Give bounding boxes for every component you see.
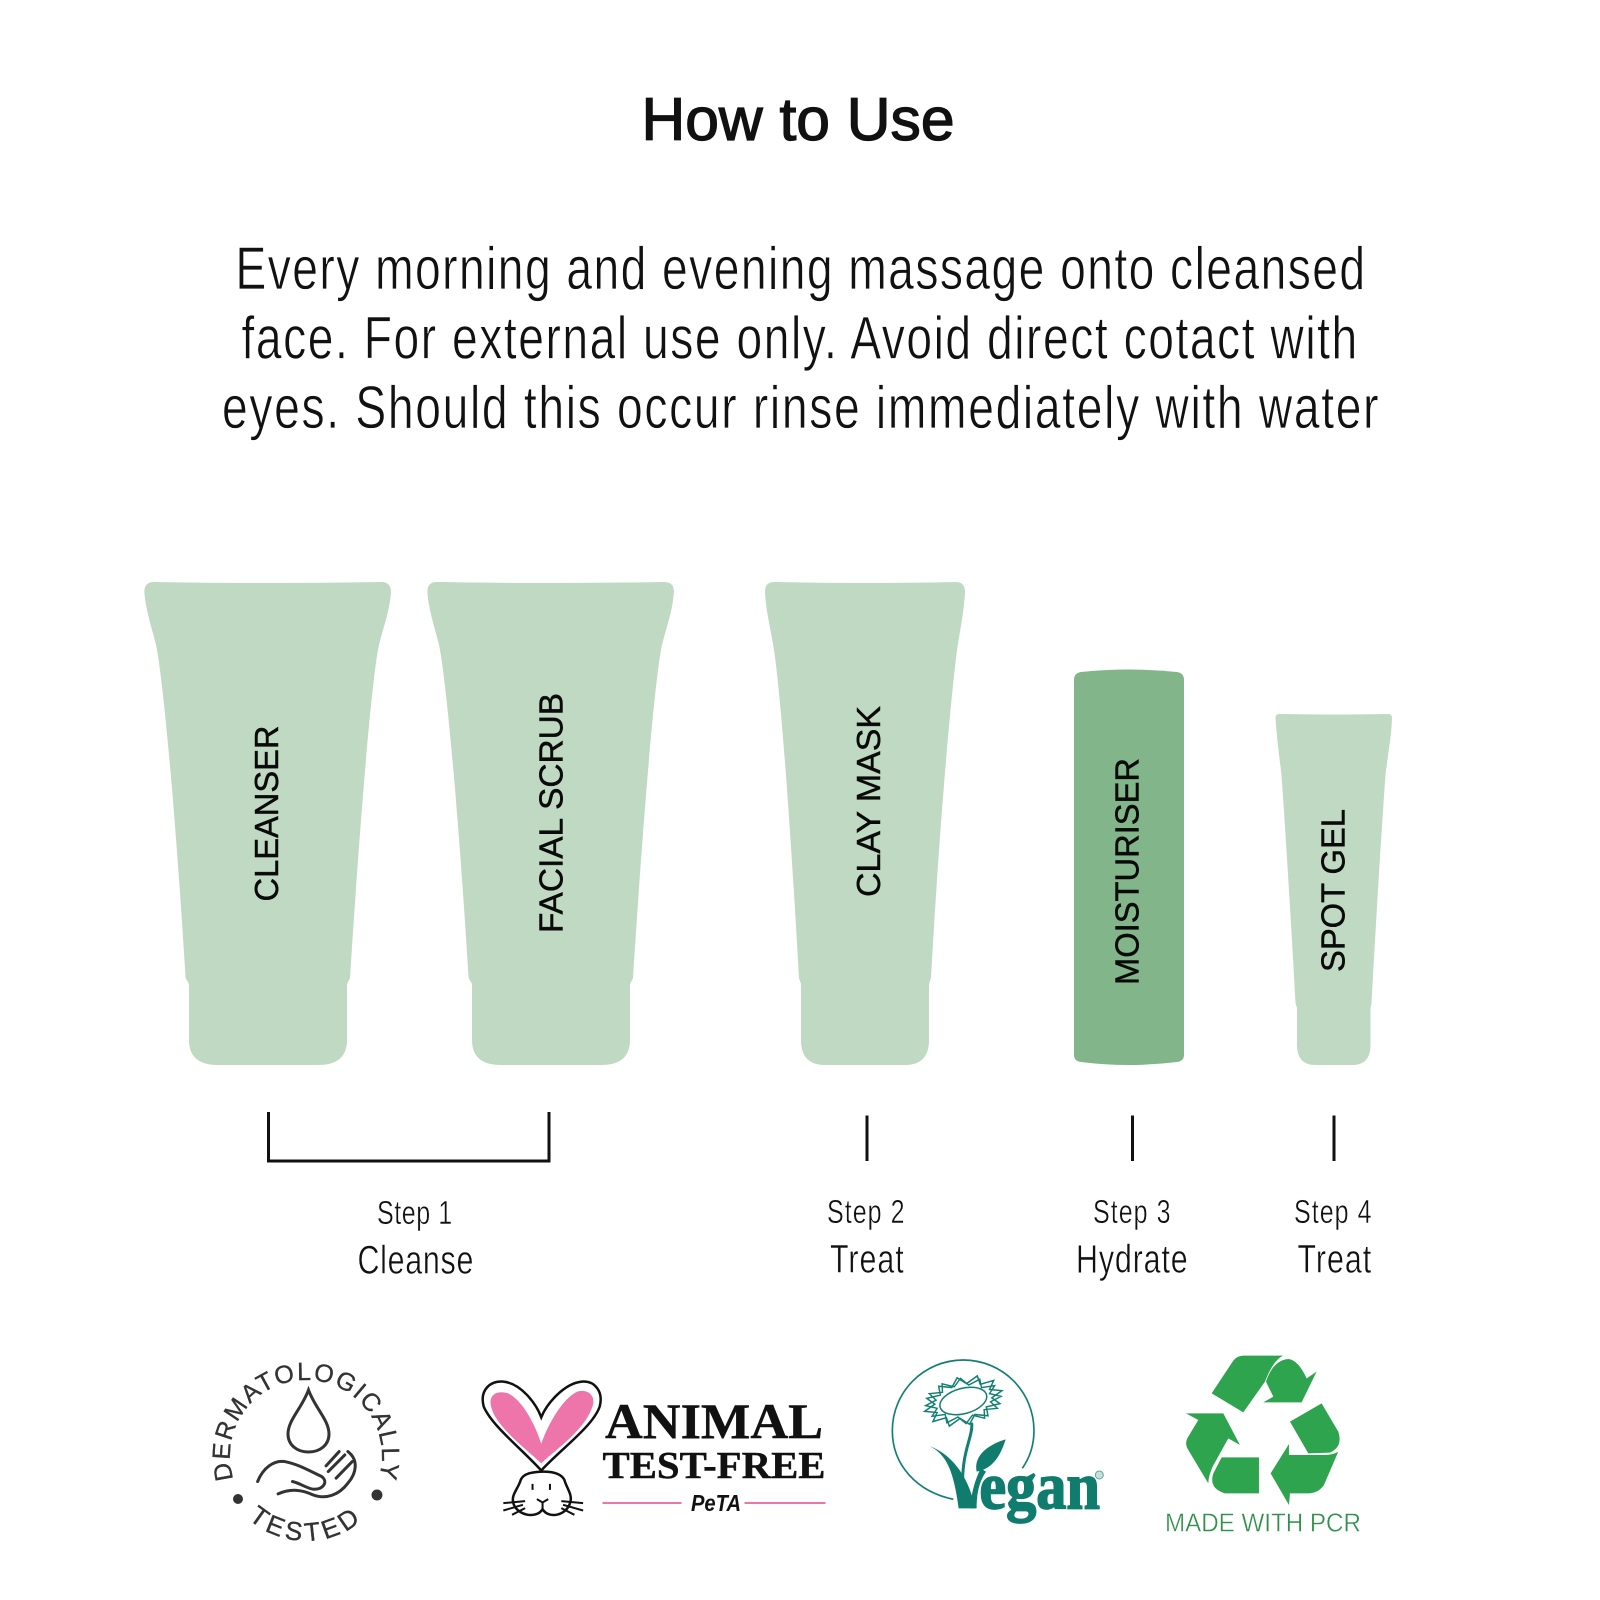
badge: animal test-free: ANIMAL	[605, 1393, 823, 1449]
icon: bunny	[483, 1382, 601, 1515]
step 1 label	[358, 1195, 473, 1283]
title: How to Use	[642, 86, 954, 153]
badge: vegan: egan	[979, 1450, 1100, 1523]
step 4 label: Treat	[1298, 1236, 1371, 1282]
tube: facial scrub: FACIAL SCRUB	[532, 693, 570, 933]
step 3 label: Step 3	[1093, 1194, 1171, 1231]
step 1 label: Cleanse	[358, 1237, 473, 1283]
icon: open hand	[258, 1452, 355, 1497]
tube: cleanser: CLEANSER	[248, 726, 285, 902]
badge: dermatologically tested	[212, 1362, 400, 1541]
tube: cleanser	[144, 582, 391, 1065]
tube: spot gel	[1276, 714, 1392, 1065]
bottle: moisturiser: MOISTURISER	[1108, 758, 1146, 985]
badge: made with PCR recycling	[1165, 1356, 1361, 1538]
badge: animal test-free	[483, 1382, 826, 1516]
step 3 label: Hydrate	[1076, 1236, 1188, 1282]
step 1 label: Step 1	[377, 1195, 452, 1232]
badge: dermatologically tested: DERMATOLOGICALLY	[212, 1362, 400, 1481]
text block: usage directions: face. For external use only. Avoid direct cotact with	[242, 306, 1357, 372]
tube: clay mask	[765, 582, 965, 1065]
step 2 tick	[866, 1116, 868, 1161]
step 2 label: Step 2	[827, 1194, 905, 1231]
badge: vegan	[892, 1360, 1103, 1523]
step 2 label: Treat	[830, 1236, 904, 1282]
bottle: moisturiser	[1074, 670, 1184, 1065]
step 4 label	[1294, 1194, 1372, 1282]
step 3 label	[1076, 1194, 1188, 1282]
badge: made with PCR recycling: MADE WITH PCR	[1165, 1508, 1361, 1538]
text block: usage directions	[222, 236, 1379, 441]
step 2 label	[827, 1194, 905, 1282]
icon: water drop	[288, 1390, 329, 1452]
panel: product tubes	[144, 582, 1392, 1065]
badge: animal test-free: TEST-FREE	[602, 1445, 826, 1487]
text block: usage directions: Every morning and evening massage onto cleansed	[236, 236, 1365, 302]
badge: dermatologically tested: TESTED	[253, 1504, 357, 1541]
tube: spot gel: SPOT GEL	[1314, 809, 1352, 972]
step 1 bracket	[268, 1112, 549, 1161]
tube: clay mask: CLAY MASK	[850, 706, 887, 897]
step 4 tick	[1332, 1116, 1336, 1161]
text block: usage directions: eyes. Should this occur rinse immediately with water	[222, 375, 1379, 441]
tube: facial scrub	[427, 582, 674, 1065]
step 3 tick	[1131, 1116, 1134, 1161]
step 4 label: Step 4	[1294, 1194, 1372, 1231]
badge: animal test-free: PeTA	[691, 1490, 741, 1516]
